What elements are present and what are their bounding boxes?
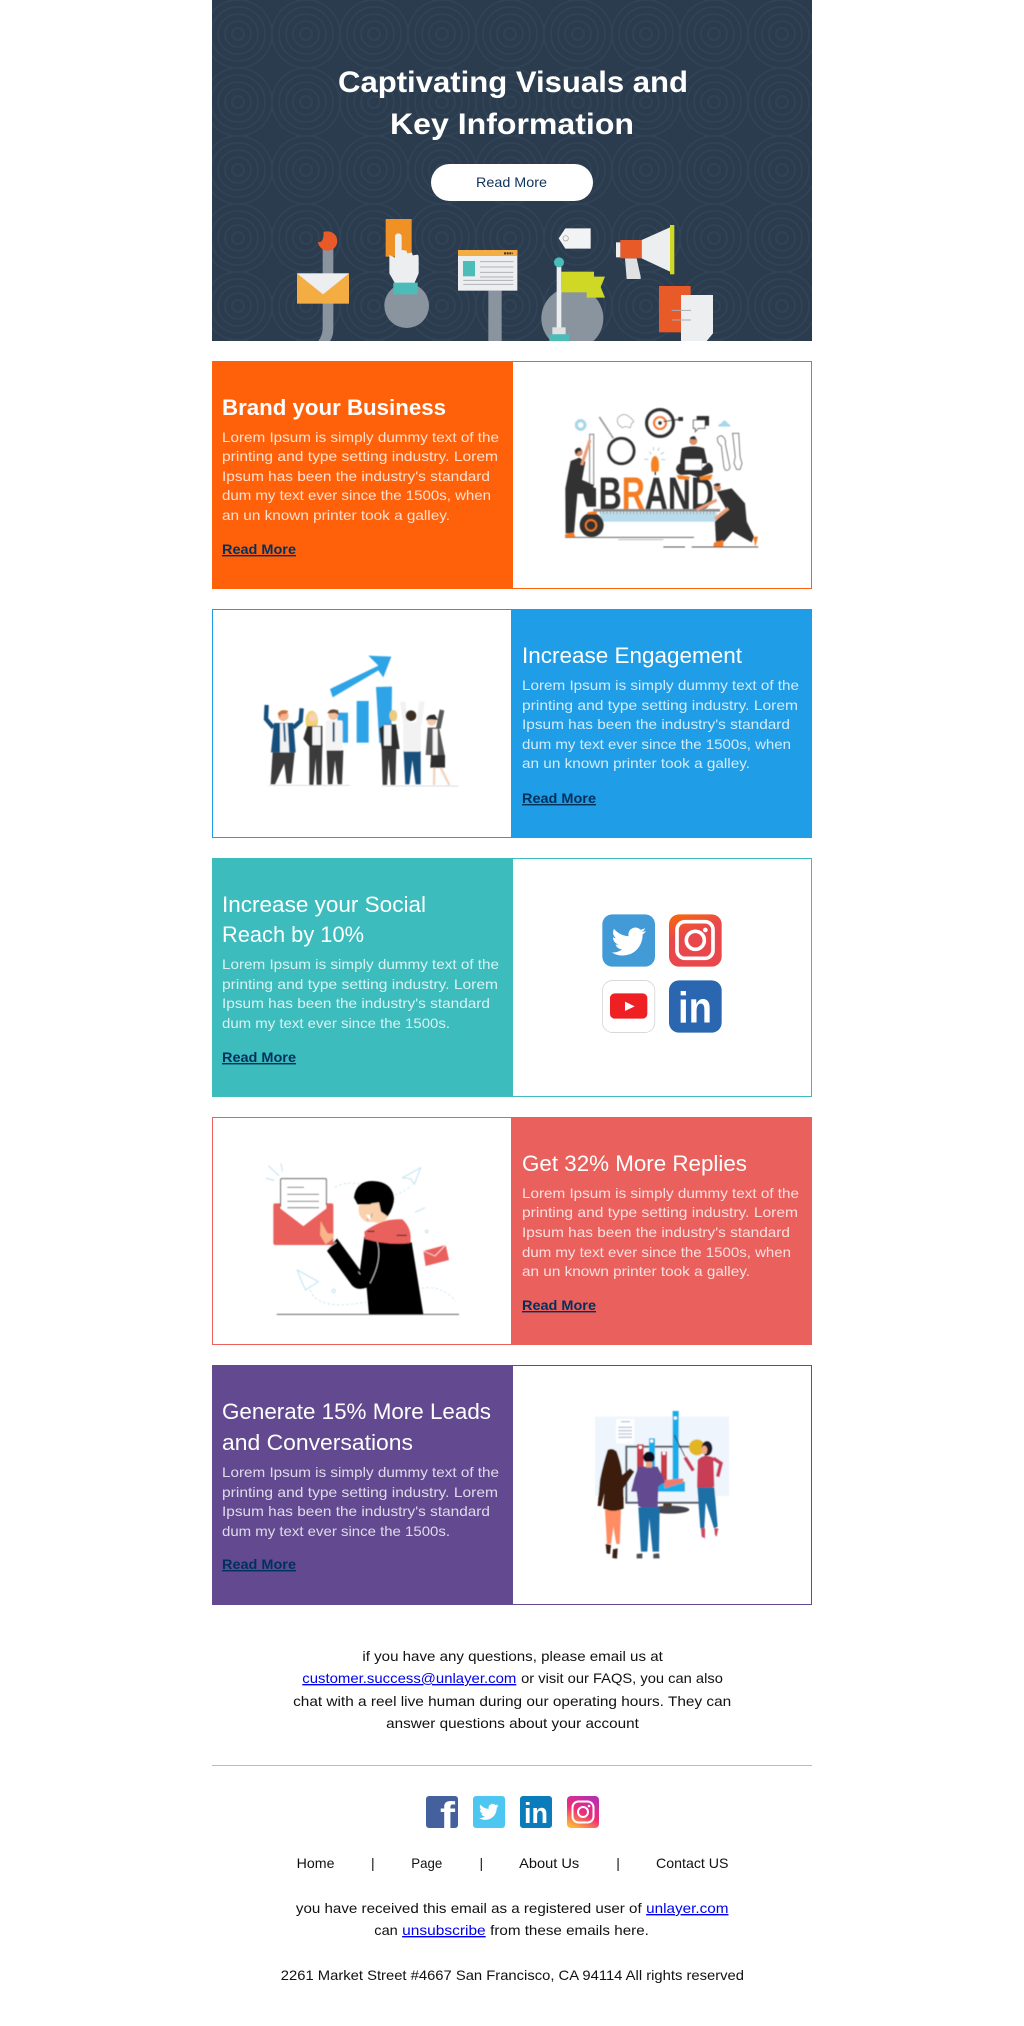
icon: facebook: f [440,1795,456,1836]
heading: Get 32% More Replies [522,1151,747,1176]
body text: an un known printer took a galley. [222,507,450,523]
body text: dum my text ever since the 1500s. [222,1523,450,1539]
email infographic page [212,0,812,1983]
icon: billboard [458,250,517,341]
icon: twitter [602,914,655,967]
body text: Lorem Ipsum is simply dummy text of the [222,429,499,445]
contact text block: answer questions about your account [386,1715,639,1731]
panel: increase social reach [212,858,812,1097]
contact text block: if you have any questions, please email us at [362,1648,663,1664]
icon: linkedin: in [678,984,712,1032]
hero title [338,66,688,141]
hero title: Key Information [390,108,634,141]
footer navigation: | [371,1855,375,1871]
registered user notice: from these emails here. [490,1922,649,1938]
body text: Ipsum has been the industry's standard [522,1224,790,1240]
brand wordmark: BRAND [599,468,714,519]
contact text block [293,1648,731,1731]
footer social icons [426,1795,599,1836]
body text: Lorem Ipsum is simply dummy text of the [522,677,799,693]
body text: dum my text ever since the 1500s. [222,1015,450,1031]
footer navigation: Contact US [656,1855,728,1871]
panel: get more replies [212,1117,812,1345]
body text: Lorem Ipsum is simply dummy text of the [222,956,499,972]
body text: printing and type setting industry. Lorem [222,976,498,992]
illustration: brand team [565,410,758,547]
body text: Lorem Ipsum is simply dummy text of the [522,1185,799,1201]
body text: Ipsum has been the industry's standard [522,716,790,732]
unsubscribe link: unsubscribe [402,1922,486,1938]
body text: printing and type setting industry. Lorem [522,697,798,713]
heading: Brand your Business [222,395,446,420]
panel: increase engagement [212,609,812,838]
icon: youtube [602,980,655,1032]
icon: facebook [426,1795,458,1836]
icon: instagram [567,1796,599,1828]
heading [222,892,426,947]
body text: dum my text ever since the 1500s, when [522,736,791,752]
body text: Ipsum has been the industry's standard [222,468,490,484]
footer navigation: | [480,1855,483,1871]
read more link: Read More [522,1297,596,1313]
footer navigation [297,1855,728,1871]
icon: linkedin: in [524,1798,548,1830]
icon: megaphone [616,225,674,279]
body text [522,1185,799,1279]
unlayer link: unlayer.com [646,1900,728,1916]
icon: documents [659,286,713,341]
body text: an un known printer took a galley. [522,755,750,771]
body text: an un known printer took a galley. [522,1263,750,1279]
hero marketing icons [297,219,713,349]
social icons grid [602,914,722,1033]
body text: dum my text ever since the 1500s, when [522,1244,791,1260]
icon: flag and tag [541,228,605,349]
body text: Ipsum has been the industry's standard [222,995,490,1011]
body text: printing and type setting industry. Lorem [222,448,498,464]
footer navigation: | [616,1855,620,1871]
hero title: Captivating Visuals and [338,66,688,99]
registered user notice: you have received this email as a registered user of [296,1900,642,1916]
heading: Increase your Social [222,892,426,917]
body text [522,677,799,771]
email link: customer.success@unlayer.com [302,1670,516,1686]
read more link: Read More [222,1556,296,1572]
footer navigation: Home [297,1855,335,1871]
read more link: Read More [222,541,296,557]
contact text block: chat with a reel live human during our operating hours. They can [293,1693,731,1709]
icon: envelope on pole [297,231,349,341]
registered user notice: can [374,1922,398,1938]
icon: pointing hand [384,219,429,328]
heading: Reach by 10% [222,922,364,947]
footer navigation: Page [411,1855,442,1871]
heading: Increase Engagement [522,643,742,668]
body text [222,429,499,523]
panel: generate more leads [212,1365,812,1605]
panel: brand your business [212,361,812,589]
body text: printing and type setting industry. Lorem [222,1484,498,1500]
contact text block: or visit our FAQS, you can also [521,1670,723,1686]
illustration: team reviewing charts [595,1411,729,1559]
illustration: man opening email [266,1163,459,1314]
heading: and Conversations [222,1430,413,1455]
heading: Generate 15% More Leads [222,1399,491,1424]
body text [222,1464,499,1539]
body text: printing and type setting industry. Lorem [522,1204,798,1220]
icon: instagram [669,914,722,967]
postal address: 2261 Market Street #4667 San Francisco, CA 94114 All rights reserved [281,1967,744,1983]
read more link: Read More [522,790,596,806]
registered user notice [296,1900,728,1938]
illustration: team celebrating growth chart [266,656,458,786]
icon: twitter [473,1796,505,1828]
body text: dum my text ever since the 1500s, when [222,487,491,503]
body text [222,956,499,1031]
body text: Ipsum has been the industry's standard [222,1503,490,1519]
body text: Lorem Ipsum is simply dummy text of the [222,1464,499,1480]
hero banner [212,0,812,349]
hero read more button: Read More [476,174,547,190]
read more link: Read More [222,1049,296,1065]
hero read more button [431,164,593,201]
heading [222,1399,491,1455]
footer navigation: About Us [519,1855,579,1871]
